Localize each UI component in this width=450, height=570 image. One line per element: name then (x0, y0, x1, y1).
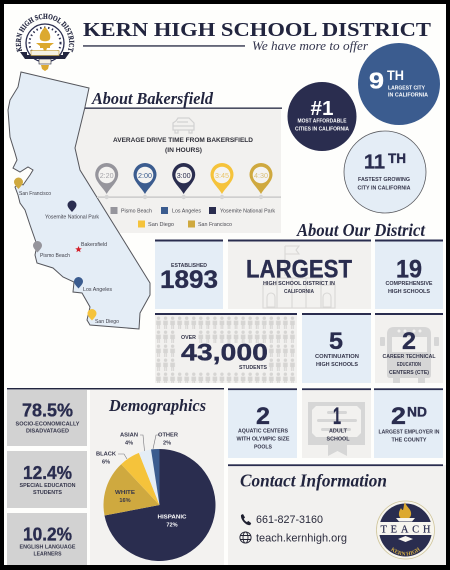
stat: 10.2% English language learners: LEARNERS (34, 552, 62, 558)
icon: rows of people (155, 316, 296, 383)
pie label: Asian (120, 433, 138, 446)
title: KERN HIGH SCHOOL DISTRICT (83, 19, 432, 41)
tile: over 43,000 students: OVER (181, 335, 196, 341)
pie label: Asian: 4% (125, 440, 133, 446)
tile: 5 continuation high schools: CONTINUATION (315, 354, 359, 360)
section rule: demographics (7, 388, 224, 390)
icon: globe (240, 532, 251, 543)
stat: 12.4% special education (7, 451, 87, 508)
tile: 2 aquatic centers (228, 388, 297, 458)
pie chart (104, 449, 216, 561)
logo: Teach Kern High (376, 500, 435, 560)
heading: Demographics: Demographics (108, 396, 206, 415)
tile: 2 career technical education centers: 2 (402, 328, 416, 355)
stat: 12.4% special education: STUDENTS (33, 490, 62, 496)
stat: 12.4% special education: SPECIAL EDUCATION (20, 483, 76, 489)
pie label: Other: OTHER (158, 433, 178, 439)
drive pin: San Diego 3:45 (210, 163, 234, 194)
drive pin: Yosemite 3:00 (172, 163, 195, 194)
circle: #1 most affordable: CITIES IN CALIFORNIA (295, 126, 349, 132)
drive time legend: Pismo Beach (121, 208, 152, 214)
tile: 2 aquatic centers: 2 (256, 403, 270, 430)
pie label: Other (158, 433, 178, 446)
stat: 78.5% socio-economically disadvantaged: 78.5% (22, 400, 73, 421)
stat: 10.2% English language learners: ENGLISH LANGUAGE (20, 545, 76, 551)
tile: 5 continuation high schools: 5 (329, 328, 343, 355)
map pin: Los Angeles (74, 277, 83, 288)
drive time heading (113, 137, 253, 154)
tile: 1 adult school: 1 (333, 403, 341, 430)
circle: 11th fastest growing (344, 131, 426, 213)
map label: Pismo Beach: Pismo Beach (40, 253, 70, 259)
tile: 2 aquatic centers: AQUATIC CENTERS (238, 429, 288, 435)
map label: Los Angeles: Los Angeles (83, 287, 112, 293)
tile: 2 career technical education centers (375, 313, 443, 383)
pie leader lines (118, 435, 160, 459)
tile: 19 comprehensive high schools: HIGH SCHOOLS (388, 289, 430, 295)
map of California (8, 72, 150, 329)
map pin: San Diego (88, 309, 96, 320)
pie label: Black: 6% (102, 459, 110, 465)
tile: established 1893: 1893 (160, 266, 218, 294)
logo: Kern High School District seal: KERN HIGH SCHOOL DISTRICT (16, 14, 74, 52)
circle: 11th fastest growing: TH (388, 150, 406, 166)
tile: 19 comprehensive high schools (375, 240, 443, 309)
pie label: White: 16% (119, 498, 131, 504)
tile: 2nd largest employer: ND (407, 404, 427, 420)
drive pin: San Francisco 4:30: 4:30 (254, 171, 268, 180)
tile: established 1893 (155, 240, 223, 309)
stat: 10.2% English language learners (7, 513, 87, 565)
circle: 9th largest city: 9 (369, 68, 384, 94)
icon: diploma certificate (308, 402, 365, 456)
tile: 2nd largest employer: LARGEST EMPLOYER IN (378, 430, 440, 436)
icon: school building (263, 246, 335, 308)
stat: 78.5% socio-economically disadvantaged: SOCIO-ECONOMICALLY (16, 421, 80, 427)
pie label: Hispanic: 72% (166, 523, 178, 529)
tile: largest high school district (228, 240, 371, 309)
drive time heading: AVERAGE DRIVE TIME FROM BAKERSFIELD (113, 137, 253, 144)
heading: Contact Information: Contact Information (240, 471, 387, 491)
drive time heading: (IN HOURS) (165, 147, 202, 154)
tile: 5 continuation high schools (302, 313, 371, 383)
icon: car (173, 118, 194, 133)
pie label: White: WHITE (115, 490, 135, 496)
tile: 5 continuation high schools: HIGH SCHOOLS (316, 362, 358, 368)
panel: demographics (90, 390, 224, 565)
tile: 2 aquatic centers: WITH OLYMPIC SIZE (236, 437, 290, 443)
tile: 2 aquatic centers: POOLS (254, 445, 272, 451)
tile: 1 adult school: SCHOOL (326, 437, 350, 443)
map pin: Yosemite (68, 200, 76, 212)
tile: 2nd largest employer: THE COUNTY (392, 438, 427, 444)
circle: 9th largest city: IN CALIFORNIA (388, 93, 428, 99)
pie label: Asian: ASIAN (120, 433, 138, 439)
website: teach.kernhigh.org (256, 533, 347, 545)
stat: 78.5% socio-economically disadvantaged (7, 390, 87, 446)
pie label: Black (96, 452, 116, 465)
drive pin: Pismo Beach 2:20: 2:20 (100, 171, 114, 180)
pie label: Other: 2% (163, 440, 171, 446)
heading: About Our District: About Our District (296, 220, 426, 240)
circle: 9th largest city: TH (387, 67, 404, 83)
map label: Bakersfield: Bakersfield (81, 242, 107, 248)
pie label: Hispanic (158, 514, 186, 529)
map label: San Francisco: San Francisco (19, 191, 51, 197)
tile: largest high school district: CALIFORNIA (284, 289, 314, 295)
stat: 78.5% socio-economically disadvantaged: DISADVATAGED (26, 428, 69, 434)
pie label: Black: BLACK (96, 452, 116, 458)
drive time legend (110, 207, 275, 228)
tile: 2 career technical education centers: EDUCATION (397, 362, 421, 368)
circle: 9th largest city (358, 43, 440, 125)
circle: 11th fastest growing: 11 (364, 151, 385, 173)
tile: 2 career technical education centers: CAREER TECHNICAL (382, 354, 436, 360)
tile: 2nd largest employer (374, 388, 443, 458)
drive pin: Los Angeles 2:00: 2:00 (138, 171, 152, 180)
drive time timeline (97, 195, 281, 199)
circle: #1 most affordable: #1 (310, 98, 334, 120)
tile: 1 adult school: ADULT (329, 429, 348, 435)
stat: 10.2% English language learners: 10.2% (23, 524, 72, 545)
circle: #1 most affordable: MOST AFFORDABLE (298, 119, 347, 125)
drive time legend: San Francisco (198, 222, 232, 228)
map label: Yosemite: Yosemite National Park (45, 214, 99, 220)
pie label: White (115, 490, 135, 504)
drive time panel background (75, 108, 281, 233)
stat: 12.4% special education: 12.4% (23, 462, 72, 483)
drive time legend: San Diego (148, 222, 174, 228)
tile: established 1893: ESTABLISHED (171, 263, 207, 269)
pie label: Hispanic: HISPANIC (158, 514, 186, 520)
tile: largest high school district: HIGH SCHOOL DISTRICT IN (263, 281, 335, 287)
tile: over 43,000 students: 43,000 (181, 340, 268, 367)
tile: over 43,000 students: STUDENTS (239, 365, 267, 371)
map pin: San Francisco (14, 178, 23, 189)
drive pin: San Diego 3:45: 3:45 (215, 171, 229, 180)
tile: 1 adult school (302, 388, 371, 458)
circle: 11th fastest growing: CITY IN CALIFORNIA (358, 185, 410, 191)
drive time legend: Los Angeles (172, 208, 201, 214)
tile: 2 career technical education centers: CENTERS (CTE) (389, 370, 429, 376)
map pin: Pismo Beach (33, 241, 42, 252)
tagline: We have more to offer (252, 38, 369, 53)
drive pin: San Francisco 4:30 (250, 163, 272, 194)
map star: Bakersfield (75, 246, 82, 252)
panel: contact information (228, 464, 446, 565)
drive pin: Yosemite 3:00: 3:00 (177, 171, 191, 180)
tile: over 43,000 students (155, 313, 297, 383)
icon: phone (241, 514, 251, 525)
circle: 11th fastest growing: FASTEST GROWING (358, 177, 410, 183)
drive pin: Los Angeles 2:00 (134, 163, 156, 194)
tile: 19 comprehensive high schools: COMPREHENSIVE (386, 281, 433, 287)
heading: About Bakersfield: About Bakersfield (91, 89, 213, 108)
logo: Teach Kern High: KERN HIGH (390, 547, 420, 556)
circle: #1 most affordable (288, 82, 356, 151)
logo: Kern High School District seal (16, 14, 74, 71)
logo: Teach Kern High: TEACH (380, 524, 431, 536)
drive time legend: Yosemite National Park (220, 208, 275, 214)
drive pin: Pismo Beach 2:20 (95, 163, 118, 194)
map label: San Diego: San Diego (95, 319, 119, 325)
tile: 2nd largest employer: 2 (391, 403, 406, 430)
circle: 9th largest city: LARGEST CITY (388, 85, 425, 91)
tile: 19 comprehensive high schools: 19 (396, 256, 422, 284)
phone number: 661-827-3160 (256, 514, 323, 526)
icon: school bus (380, 327, 439, 383)
tile: largest high school district: LARGEST (246, 256, 352, 284)
